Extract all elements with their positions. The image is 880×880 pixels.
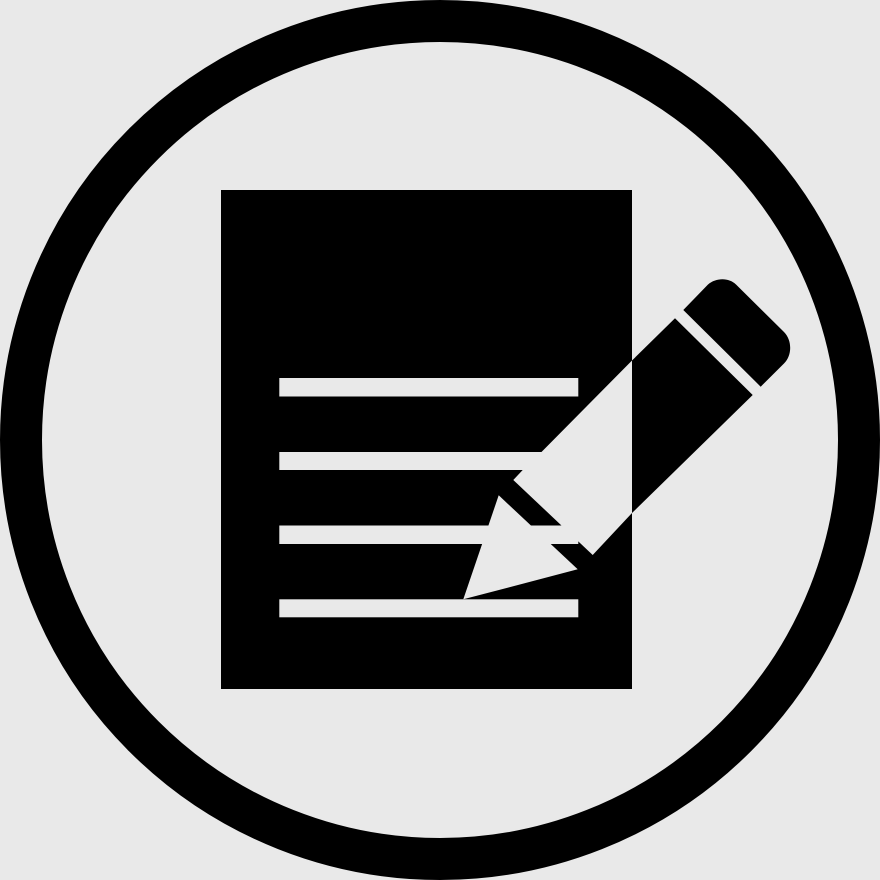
- text line 3: [279, 526, 578, 544]
- text line 4: [279, 599, 578, 617]
- pencil body outside the document: [632, 318, 753, 513]
- text line 2: [279, 452, 549, 470]
- pencil body inside the document: [513, 360, 632, 555]
- pencil tip: [463, 495, 578, 599]
- icon: pencil: [463, 279, 790, 599]
- text line 1: [279, 378, 578, 396]
- panel: document sheet: [221, 190, 632, 689]
- pencil eraser: [683, 279, 790, 387]
